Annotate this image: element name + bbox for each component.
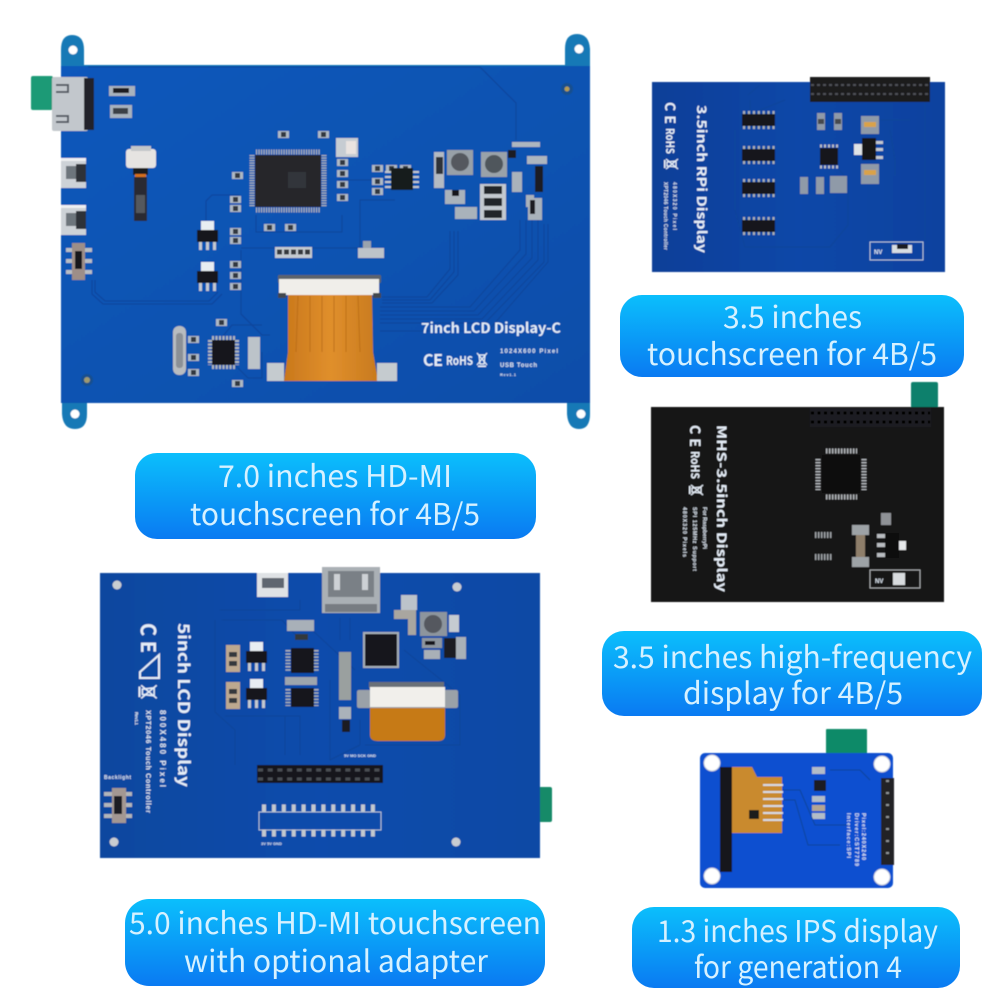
regulator (877, 513, 906, 558)
small specs (662, 182, 677, 250)
small specs: 480X320 Pixel (671, 182, 677, 231)
small IC (385, 168, 419, 190)
traces (215, 600, 460, 765)
board surface (61, 66, 590, 403)
panel: 1.3 inch IPS board (700, 729, 894, 888)
pin header (257, 765, 383, 783)
NV connector pads: NV (875, 579, 883, 585)
small specs: 800X480 Pixel (158, 710, 167, 787)
pad rows (259, 808, 381, 833)
NV connector pads: NV (874, 250, 882, 256)
orange flex ribbon (267, 295, 397, 381)
CE RoHS marks: RoHS (662, 128, 678, 154)
logic chip pins (288, 650, 316, 706)
capacitors and regulator (854, 116, 883, 184)
pad row labels: 3V 5V GND (261, 841, 282, 846)
spec text (500, 349, 558, 377)
screw lower left (81, 374, 93, 386)
FFC pad row (275, 241, 384, 258)
pad column (852, 525, 869, 567)
backlight switch (66, 243, 92, 280)
green cap (538, 787, 552, 822)
middle chip (820, 146, 838, 167)
QFP chip (818, 451, 864, 497)
panel: 5 inch HDMI board (100, 567, 552, 858)
inductor and power parts (394, 595, 466, 659)
label: 7 inch: 7.0 inches HD-MI (218, 452, 452, 496)
traces (783, 770, 870, 845)
rotated title: 5inch LCD Display (173, 623, 197, 787)
small specs (134, 710, 167, 813)
screws (110, 580, 462, 846)
FFC connector (278, 275, 381, 298)
certification marks (423, 347, 487, 371)
backlight switch (104, 775, 132, 823)
label: 5 inch: with optional adapter (184, 937, 488, 981)
spec text: 1024X600 Pixel (500, 349, 558, 355)
screw upper right (561, 83, 573, 95)
power section (434, 142, 547, 220)
label: 1.3 inch (632, 907, 960, 988)
logic chip bodies (291, 648, 314, 707)
certification marks: CE (423, 347, 443, 371)
small specs: XPT2046 Touch Controller (144, 710, 151, 813)
small specs: XPT2046 Touch Controller (662, 182, 668, 250)
LED module (336, 138, 358, 157)
certification marks (135, 623, 164, 698)
panel: 3.5 inch RPi board (652, 77, 945, 272)
rotated title: MHS-3.5inch Display (713, 425, 732, 593)
main processor chip (252, 152, 324, 210)
label: 5 inch: 5.0 inches HD-MI touchscreen (129, 899, 541, 943)
label: 7 inch: touchscreen for 4B/5 (190, 490, 480, 534)
pads around main chip (230, 131, 411, 290)
HDMI connector with green cap (31, 76, 94, 131)
mounting holes (68, 44, 586, 418)
pin header (881, 778, 894, 865)
panel: 7 inch HDMI touchscreen board (31, 34, 590, 429)
small specs: SPI 125MHz Support (691, 507, 697, 571)
micro USB port (257, 573, 288, 597)
white button and ribbon (126, 146, 156, 221)
GPIO header (810, 77, 930, 102)
small parts near HDMI (109, 86, 135, 118)
holes (704, 755, 890, 885)
CE RoHS marks: RoHS (687, 451, 703, 479)
pads and small parts (226, 620, 351, 732)
pin header labels: 5V MO SCK GND (344, 753, 376, 758)
board surface (700, 753, 893, 888)
green cap (911, 382, 938, 408)
label: 3.5 inch high-frequency: display for 4B/5 (683, 669, 903, 713)
circuit traces (88, 67, 548, 378)
green cap (826, 729, 867, 754)
board outline with mounting ears (61, 34, 590, 429)
small parts (812, 767, 826, 819)
black display strip (720, 767, 732, 872)
NV connector pads (870, 570, 920, 588)
backlight switch: Backlight (104, 775, 131, 781)
label: 7 inch (135, 452, 536, 539)
GPIO header (810, 408, 931, 427)
label: 3.5 inch touchscreen (620, 293, 964, 377)
rotated specs: Driver:CST7789 (853, 813, 859, 866)
FFC connector (357, 682, 458, 708)
panel: 3.5 inch high frequency black board (651, 382, 944, 602)
small specs: 480X320 Pixels (681, 507, 687, 557)
CE RoHS marks: CE (660, 102, 680, 124)
rotated specs: Interface:SPI (845, 813, 851, 858)
spec text: USB Touch (500, 363, 537, 369)
traces (735, 85, 925, 247)
orange flex (732, 767, 783, 833)
regulators (246, 642, 267, 708)
micro USB ports (61, 158, 86, 235)
CE RoHS marks: CE (685, 425, 705, 447)
rotated specs: Pixel:240X240 (860, 813, 866, 860)
label: 1.3 inch: 1.3 inches IPS display (657, 907, 938, 951)
certification marks: CE (135, 623, 164, 653)
label: 1.3 inch: for generation 4 (694, 943, 902, 987)
small specs: Rev1.1 (134, 712, 139, 725)
certification marks: RoHS (446, 352, 473, 369)
small chip (815, 535, 833, 557)
rotated specs (845, 813, 866, 866)
label: 5 inch (125, 899, 545, 986)
crystal oscillator (173, 326, 186, 375)
label: 3.5 inch touchscreen: touchscreen for 4B/5 (647, 330, 937, 374)
HDMI connector (322, 567, 380, 613)
NV connector pads (870, 242, 923, 260)
resistors (800, 113, 847, 194)
CE RoHS marks (660, 102, 680, 169)
regulators (197, 221, 218, 291)
small specs (681, 507, 707, 571)
small specs: For RaspberryPi (701, 507, 707, 549)
rotated title: 3.5inch RPi Display (693, 105, 712, 254)
QFN chip (363, 632, 399, 668)
label: 3.5 inch touchscreen: 3.5 inches (723, 293, 862, 337)
orange flex ribbon (370, 707, 445, 741)
CE RoHS marks (685, 425, 705, 495)
logic chips (742, 112, 775, 234)
board surface (651, 407, 944, 602)
label: 3.5 inch high-frequency: 3.5 inches high-frequency (613, 633, 972, 677)
touch controller chip (188, 319, 260, 387)
product title text: 7inch LCD Display-C (421, 318, 561, 338)
spec text: Rev1.1 (500, 372, 517, 377)
board surface (652, 82, 945, 272)
label: 3.5 inch high-frequency (602, 631, 982, 716)
board surface (100, 573, 540, 858)
